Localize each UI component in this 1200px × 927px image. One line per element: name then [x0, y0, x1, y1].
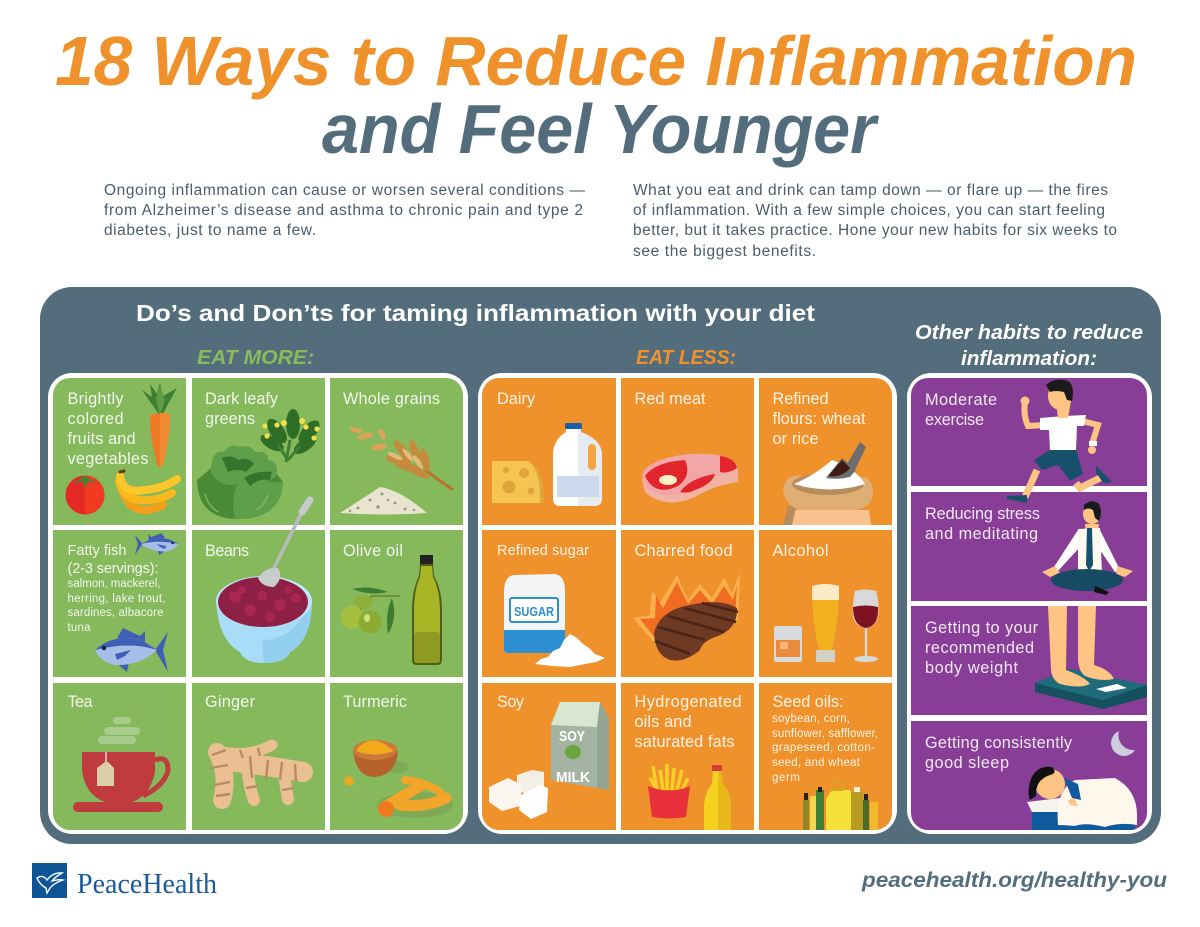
- label: red meat: Red meat: [634, 390, 706, 408]
- icon: beer glass: [812, 584, 839, 662]
- icon: whisky glass: [774, 626, 802, 662]
- label: alcohol: Alcohol: [772, 542, 828, 560]
- eat less heading: EAT LESS:: [636, 347, 736, 369]
- label: olive oil: Olive oil: [343, 542, 403, 560]
- label: dark leafy greens: [205, 390, 279, 428]
- icon: whole grains: [349, 426, 453, 490]
- label: fatty fish: (2-3 servings):: [68, 561, 158, 577]
- icon: grain pile: [340, 487, 427, 514]
- icon: sleeping person: [1027, 767, 1137, 830]
- label: whole grains: Whole grains: [343, 390, 440, 408]
- label: seed oils: Seed oils:: [772, 693, 844, 711]
- intro text: left: from Alzheimer’s disease and asthma to chronic pain and type 2: [104, 202, 583, 219]
- title: 18 Ways to Reduce Inflammation: [55, 22, 1137, 100]
- icon: wine glass: [853, 590, 879, 662]
- label: turmeric: Turmeric: [343, 693, 407, 711]
- label: moderate exercise: Moderate: [925, 391, 997, 409]
- label: seed oils: [772, 693, 878, 784]
- icon: sugar pile: [535, 634, 605, 667]
- intro text: right: What you eat and drink can tamp down — or flare up — the fires: [633, 182, 1108, 199]
- label: fatty fish: tuna: [68, 622, 91, 634]
- other habits heading: [915, 322, 1143, 370]
- label: good sleep: [925, 734, 1073, 772]
- icon: small fish: [135, 533, 178, 555]
- icon: bananas: [119, 471, 177, 510]
- label: fruits and vegetables: Brightly: [68, 390, 124, 408]
- icon: soy milk carton: [551, 702, 609, 790]
- icon: sugar bag: [504, 574, 565, 653]
- intro text: right: see the biggest benefits.: [633, 243, 816, 260]
- label: tea: Tea: [68, 693, 93, 711]
- label: fruits and vegetables: colored: [68, 410, 124, 428]
- panel: other habits: [907, 373, 1152, 834]
- logo: PeaceHealth: PeaceHealth: [77, 868, 217, 900]
- eat more heading: EAT MORE:: [197, 347, 314, 369]
- icon: tea cup: [73, 717, 168, 812]
- other habits heading: inflammation:: [961, 348, 1097, 370]
- label: good sleep: Getting consistently: [925, 734, 1073, 752]
- icon: turmeric: [344, 740, 453, 818]
- label: refined flours: flours: wheat: [772, 410, 866, 428]
- icon: large fish: [95, 628, 168, 672]
- label: hydrogenated oils: [634, 693, 742, 751]
- label: seed oils: germ: [772, 772, 800, 784]
- panel heading: Do’s and Don’ts for taming inflammation with your diet: [136, 300, 815, 326]
- icon: seed oil bottles: [803, 781, 878, 830]
- label: soy: Soy: [497, 693, 525, 711]
- icon: runner: [1007, 380, 1112, 503]
- label: moderate exercise: exercise: [925, 411, 984, 429]
- label: good sleep: good sleep: [925, 754, 1009, 772]
- label: seed oils: grapeseed, cotton-: [772, 742, 875, 754]
- label: body weight: body weight: [925, 659, 1018, 677]
- icon: bean bowl with spoon: [216, 500, 312, 663]
- logo: PeaceHealth: [32, 863, 217, 900]
- intro text: right: better, but it takes practice. Hone your new habits for six weeks to: [633, 222, 1117, 239]
- label: fatty fish: Fatty fish: [68, 543, 126, 559]
- label: fatty fish: sardines, albacore: [68, 607, 164, 619]
- label: moderate exercise: [925, 391, 997, 429]
- main slate panel: [40, 287, 1161, 844]
- label: hydrogenated oils: Hydrogenated: [634, 693, 742, 711]
- icon: meditating man: [1042, 501, 1133, 595]
- icon: olives: [340, 588, 400, 634]
- label: seed oils: soybean, corn,: [772, 713, 850, 725]
- icon: milk jug: [553, 423, 602, 506]
- icon: soy milk carton: SOY: [559, 728, 585, 745]
- label: hydrogenated oils: oils and: [634, 713, 692, 731]
- label: hydrogenated oils: saturated fats: [634, 733, 734, 751]
- label: dark leafy greens: Dark leafy: [205, 390, 279, 408]
- intro text: left: Ongoing inflammation can cause or worsen several conditions —: [104, 182, 586, 199]
- label: refined sugar: Refined sugar: [497, 543, 589, 559]
- intro text: right: of inflammation. With a few simple choices, you can start feeling: [633, 202, 1105, 219]
- label: fruits and vegetables: [68, 390, 148, 468]
- label: fatty fish: salmon, mackerel,: [68, 578, 160, 590]
- title: [55, 22, 1137, 168]
- label: beans: Beans: [205, 542, 249, 560]
- icon: flour sack: [783, 442, 873, 525]
- panel: eat more: [48, 373, 468, 834]
- label: refined flours: Refined: [772, 390, 828, 408]
- panel: eat less: [478, 373, 897, 835]
- label: fatty fish: [68, 543, 166, 634]
- label: charred food: Charred food: [634, 542, 732, 560]
- label: ginger: Ginger: [205, 693, 256, 711]
- intro text: left: diabetes, just to name a few.: [104, 222, 316, 239]
- label: dairy: Dairy: [497, 390, 536, 408]
- label: body weight: [925, 619, 1039, 677]
- label: fruits and vegetables: vegetables: [68, 450, 148, 468]
- footer url: peacehealth.org/healthy-you: [861, 869, 1167, 892]
- icon: fries: [648, 764, 690, 818]
- icon: olive oil bottle: [412, 555, 442, 665]
- label: fatty fish: herring, lake trout,: [68, 593, 166, 605]
- label: reducing stress: [925, 505, 1040, 543]
- title: and Feel Younger: [322, 90, 880, 168]
- icon: cheese: [492, 461, 544, 503]
- icon: moon: [1111, 731, 1135, 756]
- icon: carrot: [142, 383, 177, 467]
- label: body weight: Getting to your: [925, 619, 1039, 637]
- icon: vegetable oil bottle: [704, 765, 731, 835]
- icon: charred steak: [633, 573, 740, 661]
- label: seed oils: sunflower, safflower,: [772, 728, 878, 740]
- icon: scale and legs: [1035, 606, 1147, 709]
- intro text: left: [104, 182, 586, 239]
- label: fruits and vegetables: fruits and: [68, 430, 136, 448]
- label: reducing stress: and meditating: [925, 525, 1038, 543]
- label: refined flours: [772, 390, 866, 448]
- label: seed oils: seed, and wheat: [772, 757, 861, 769]
- icon: red meat: [642, 454, 738, 502]
- icon: lettuce: [197, 446, 283, 519]
- icon: sugar bag: SUGAR: [514, 604, 555, 619]
- label: dark leafy greens: greens: [205, 410, 255, 428]
- icon: dark greens bouquet: [258, 409, 323, 462]
- label: refined flours: or rice: [772, 430, 818, 448]
- label: body weight: recommended: [925, 639, 1034, 657]
- icon: ginger: [210, 745, 303, 800]
- icon: tomato: [66, 476, 104, 514]
- icon: soy milk carton: MILK: [556, 769, 590, 786]
- intro text: right: [633, 182, 1117, 260]
- icon: tofu: [489, 770, 548, 819]
- label: reducing stress: Reducing stress: [925, 505, 1040, 523]
- other habits heading: Other habits to reduce: [915, 322, 1143, 344]
